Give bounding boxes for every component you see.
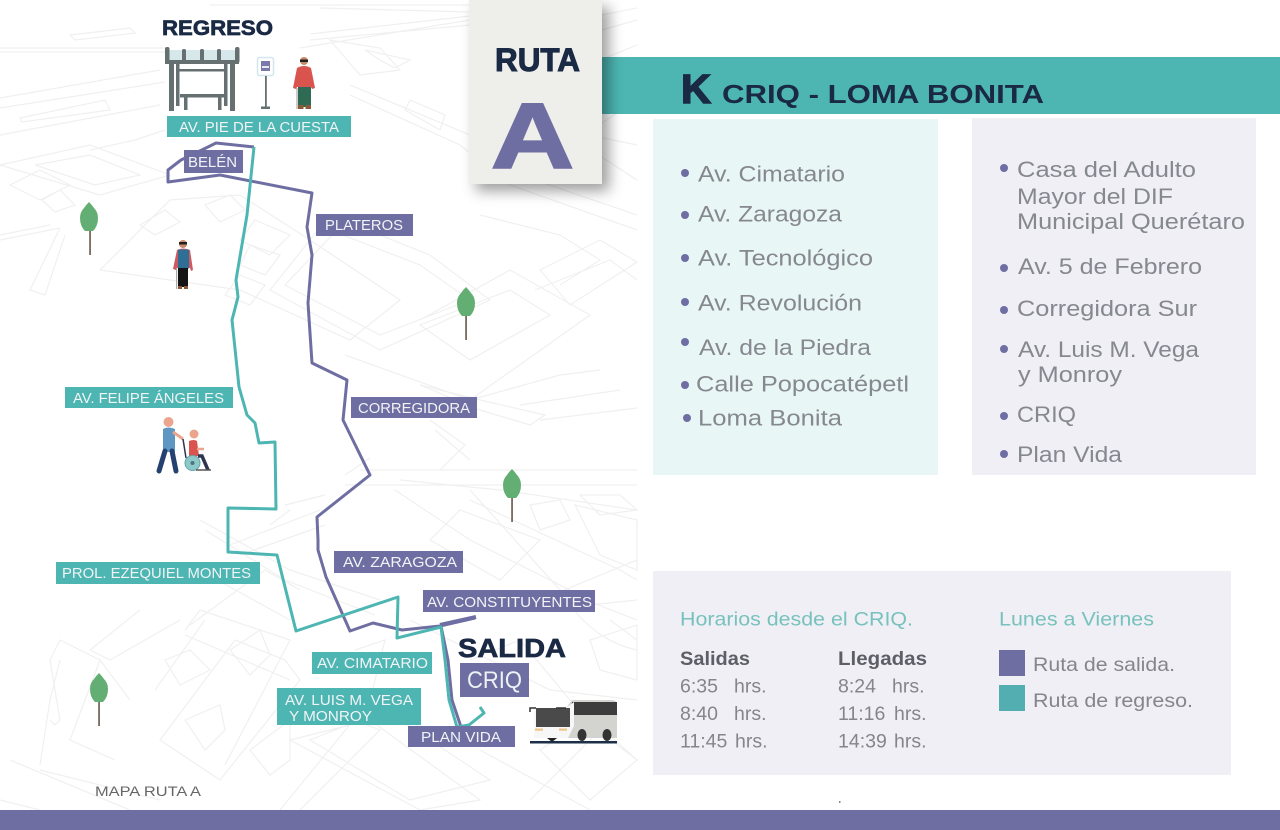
panel: return streets list: Plan Vida — [1017, 442, 1123, 467]
panel: return streets list: CRIQ — [1017, 402, 1076, 427]
route line: outbound purple final stretch — [441, 626, 461, 727]
panel: outbound streets list: Av. Zaragoza — [698, 202, 843, 226]
tag: Av. Cimatario: AV. CIMATARIO — [317, 656, 428, 672]
panel: schedule and legend: Llegadas — [838, 648, 927, 670]
panel: outbound streets list: Av. de la Piedra — [699, 335, 872, 360]
map caption: MAPA RUTA A — [95, 783, 202, 799]
panel: return streets list: y Monroy — [1018, 362, 1123, 387]
panel: schedule and legend: 11:45 — [680, 730, 727, 752]
icon: tree 1 — [80, 202, 98, 255]
card: route A — [469, 0, 602, 188]
panel: outbound streets list: Av. Revolución — [698, 290, 862, 316]
panel: schedule and legend: 6:35 — [680, 676, 718, 698]
tag: Av. Pie de la Cuesta — [167, 116, 351, 137]
tag: Prol. Ezequiel Montes — [56, 562, 260, 584]
card: route A: RUTA — [495, 42, 580, 78]
map street background — [0, 5, 637, 810]
panel: return streets list: Municipal Querétaro — [1017, 209, 1245, 234]
tag: Av. Felipe Ángeles: AV. FELIPE ÁNGELES — [73, 390, 224, 407]
panel: outbound streets list: Av. Cimatario — [698, 162, 845, 186]
tag: Plateros — [316, 214, 413, 236]
panel: schedule and legend: Ruta de salida. — [1033, 654, 1175, 676]
panel: schedule and legend: 14:39 — [838, 730, 887, 752]
icon: caregiver and wheelchair — [159, 417, 211, 471]
heading: Regreso: REGRESO — [162, 17, 273, 40]
panel: outbound streets list: Loma Bonita — [698, 406, 843, 430]
tag: Av. Cimatario — [312, 652, 432, 674]
tag: Prol. Ezequiel Montes: PROL. EZEQUIEL MONTES — [62, 566, 251, 582]
panel: return streets list: Mayor del DIF — [1017, 184, 1173, 209]
tag: Plan Vida: PLAN VIDA — [421, 730, 501, 746]
panel: return streets list: Casa del Adulto — [1017, 157, 1196, 182]
tag: Corregidora: CORREGIDORA — [358, 401, 470, 417]
panel: schedule and legend: Salidas — [680, 648, 750, 670]
route letter K: K — [681, 66, 711, 112]
tag: Av. Constituyentes — [423, 590, 595, 612]
panel: schedule and legend: hrs. — [892, 676, 925, 698]
route line: return teal — [228, 147, 484, 727]
panel: route schedule band — [600, 57, 1280, 114]
heading: Salida: SALIDA — [458, 633, 566, 663]
heading: route name: CRIQ - LOMA BONITA — [722, 79, 1044, 109]
icon: person with cane red — [293, 57, 315, 109]
panel: outbound streets list: Calle Popocatépetl — [696, 372, 909, 396]
icon: tree 3 — [503, 469, 521, 522]
panel: schedule and legend: hrs. — [734, 703, 767, 725]
route line: outbound purple — [168, 143, 475, 631]
tag: Av. Luis M. Vega y Monroy: AV. LUIS M. VEGA — [285, 693, 413, 709]
tag: Av. Zaragoza — [334, 551, 463, 573]
panel: return streets list: Corregidora Sur — [1017, 296, 1198, 321]
panel: schedule and legend: hrs. — [894, 703, 927, 725]
icon: person with cane blue — [173, 240, 193, 289]
icon: bus shelter — [165, 47, 240, 111]
footer bar — [0, 810, 1280, 830]
tag: Av. Zaragoza: AV. ZARAGOZA — [343, 555, 457, 571]
panel: return streets list — [972, 118, 1256, 475]
tag: Av. Pie de la Cuesta: AV. PIE DE LA CUESTA — [179, 120, 339, 136]
panel: schedule and legend: Horarios desde el CRIQ. — [680, 608, 913, 630]
tag: Av. Felipe Ángeles — [65, 387, 233, 408]
icon: bus — [530, 700, 617, 744]
tag: Av. Luis M. Vega y Monroy: Y MONROY — [289, 709, 372, 725]
tag: Av. Luis M. Vega y Monroy — [277, 688, 421, 725]
panel: schedule and legend: 8:40 — [680, 703, 718, 725]
icon: tree 2 — [457, 287, 475, 340]
tag: Corregidora — [351, 397, 477, 418]
panel: outbound streets list — [653, 119, 938, 475]
card: route A: A — [491, 84, 574, 188]
tag: Av. Constituyentes: AV. CONSTITUYENTES — [427, 595, 592, 611]
tag: Plateros: PLATEROS — [325, 218, 403, 234]
panel: schedule and legend — [653, 571, 1231, 775]
icon: bus stop sign — [258, 58, 274, 109]
panel: schedule and legend: hrs. — [735, 730, 768, 752]
panel: schedule and legend: Ruta de regreso. — [1033, 690, 1193, 712]
panel: schedule and legend: Lunes a Viernes — [999, 608, 1154, 630]
panel: outbound streets list: Av. Tecnológico — [698, 246, 873, 270]
panel: schedule and legend: hrs. — [894, 730, 927, 752]
panel: return streets list: Av. 5 de Febrero — [1018, 254, 1202, 279]
tag: CRIQ — [460, 663, 529, 697]
tag: CRIQ: CRIQ — [467, 667, 522, 694]
tag: Belén: BELÉN — [188, 154, 237, 171]
tag: Belén — [184, 150, 243, 173]
tag: Plan Vida — [408, 726, 515, 747]
panel: schedule and legend: hrs. — [734, 676, 767, 698]
panel: return streets list: Av. Luis M. Vega — [1018, 337, 1200, 362]
panel: schedule and legend: 8:24 — [838, 676, 876, 698]
icon: tree 4 — [90, 673, 108, 726]
panel: schedule and legend: 11:16 — [838, 703, 885, 725]
